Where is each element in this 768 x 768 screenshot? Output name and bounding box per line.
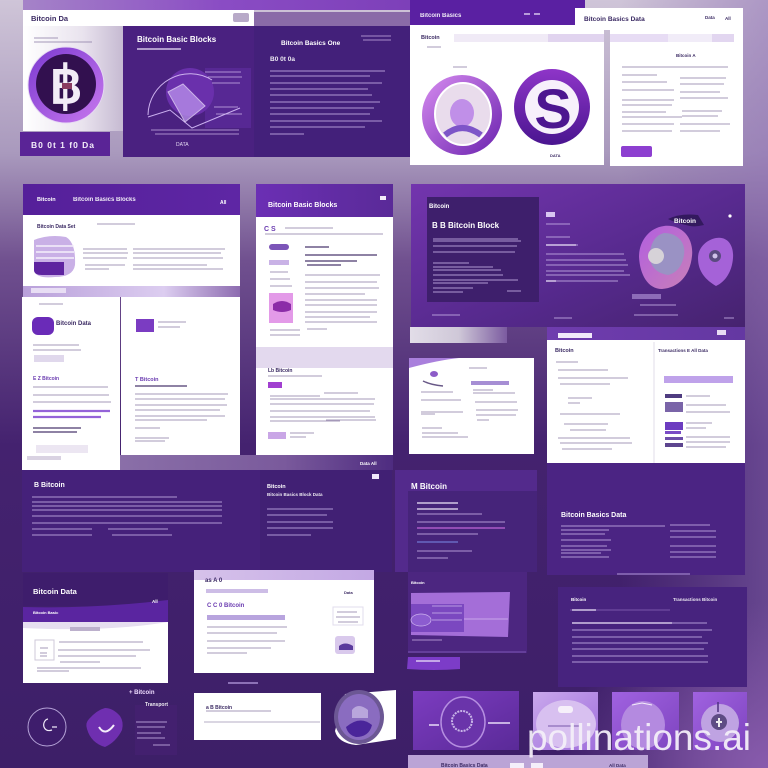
panel: purple list card <box>395 470 537 572</box>
text block: hero dark column <box>433 239 521 292</box>
panel: top right header <box>410 0 585 25</box>
text block: hero centre <box>546 212 630 281</box>
illustration: large blob <box>639 226 692 289</box>
panel: left report stack: E Z Bitcoin <box>33 376 59 382</box>
panel: centre report: Data All <box>360 461 377 466</box>
panel: left report stack: Bitcoin Basics Blocks <box>73 197 136 203</box>
illustration: wireframe wallet <box>148 68 251 134</box>
icon: small document <box>35 640 54 660</box>
panel: dark sheet bottom-left: All <box>152 599 158 604</box>
heading: bottom-left sheet: Bitcoin Data <box>33 587 78 596</box>
panel: left report stack: All <box>220 200 227 206</box>
panel: dark article with illustration: DATA <box>176 142 189 148</box>
icon: purple rounded diamond <box>86 708 123 747</box>
heading: left report: Bitcoin <box>37 197 56 203</box>
button: coin card: B0 0t 1 f0 Da <box>31 140 95 150</box>
panel: lilac square <box>533 692 598 750</box>
heading: centre report: Bitcoin Basic Blocks <box>268 202 337 209</box>
panel: purple hero with blobs <box>411 184 745 327</box>
panel: purple square with ring <box>413 691 519 750</box>
icon: small corner mark <box>372 474 379 479</box>
panel: dark note card <box>547 463 745 575</box>
panel: white bottom card <box>194 693 321 740</box>
heading: wide report right: Transactions E All Data <box>658 348 708 353</box>
panel: dark article row <box>22 470 392 572</box>
panel: wide white report <box>547 327 745 463</box>
panel: lilac chart card: Bitcoin <box>411 580 425 585</box>
icon: purple badge <box>32 317 54 335</box>
subheading: article: Bitcoin A <box>676 53 696 58</box>
illustration: small blob <box>698 238 733 286</box>
heading: hero: B B Bitcoin Block <box>432 221 500 230</box>
panel: dark sheet bottom-left <box>23 573 168 683</box>
icon: side tags <box>269 244 293 323</box>
panel: dark sheet bottom-left: Bitcoin Basic <box>33 610 59 615</box>
heading: dark row right: Bitcoin <box>267 484 286 490</box>
button: coin card <box>20 132 110 156</box>
icon: dark chip: Bitcoin <box>674 218 696 225</box>
panel: white card with lilac top <box>194 570 374 673</box>
button: lilac card <box>407 657 460 670</box>
panel: purple square with pendant <box>693 692 747 750</box>
icon: lilac portrait coin <box>422 75 502 155</box>
panel: white bottom card: a B Bitcoin <box>206 705 232 711</box>
panel: centre report: C S <box>264 226 276 233</box>
panel: top right white header: All <box>725 16 731 21</box>
heading: left column: Bitcoin Data <box>56 321 92 327</box>
heading: wide report left: Bitcoin <box>555 348 574 354</box>
button: article <box>621 146 652 157</box>
icon: curled sheet badge <box>334 690 396 745</box>
heading: dark article left: Bitcoin Basic Blocks <box>137 35 217 44</box>
heading: coins card: Bitcoin <box>421 35 440 41</box>
watermark: pollinations.ai <box>527 717 751 758</box>
subheading: dark article: B0 0t 0a <box>270 56 295 63</box>
panel: coin card <box>20 10 410 156</box>
heading: note card: Bitcoin Basics Data <box>561 512 626 519</box>
panel: left report stack: Bitcoin Data Set <box>37 224 76 230</box>
panel: top right white header <box>575 8 743 30</box>
panel: white card with lilac top: Data <box>344 590 353 595</box>
panel: top right white header: Bitcoin Basics Data <box>584 16 645 23</box>
icon: outlined circle <box>28 708 66 746</box>
heading: list card: M Bitcoin <box>411 482 447 491</box>
panel: dark text card <box>558 587 747 687</box>
panel: grey strip <box>410 327 507 343</box>
text block: article <box>622 67 730 131</box>
heading: dark article right: Bitcoin Basics One <box>281 40 341 47</box>
panel: top right white header: Data <box>705 15 715 20</box>
icon: letter S coin <box>514 69 590 145</box>
panel: centre report <box>256 184 393 466</box>
panel: left report stack <box>22 184 393 470</box>
heading: coin card: Bitcoin Da <box>31 14 69 23</box>
icon: bitcoin coin: ฿ <box>49 57 83 115</box>
panel: purple square with dome <box>612 692 679 750</box>
heading: dark row left: B Bitcoin <box>34 482 65 489</box>
panel: bottom lilac sheet: All Data <box>609 763 626 768</box>
panel: dark text card: Bitcoin <box>571 597 587 602</box>
panel: white card with lilac top: as A 0 <box>205 578 223 584</box>
icon: small purple tag <box>136 319 154 332</box>
icon: bitcoin coin <box>28 47 104 123</box>
text block: dark row right <box>267 509 333 535</box>
panel: top right article <box>610 30 743 166</box>
panel: centre report: Lb Bitcoin <box>268 368 292 374</box>
panel: lilac chart card <box>408 572 527 653</box>
top purple band <box>23 0 423 10</box>
panel: dark article with illustration <box>123 26 410 157</box>
icon: dark chip <box>668 214 704 226</box>
label: bottom tag: + Bitcoin <box>129 690 155 696</box>
heading: hero tag: Bitcoin <box>429 204 450 210</box>
panel: top right header: Bitcoin Basics <box>420 13 462 19</box>
panel: top right coins card: DATA <box>550 153 561 158</box>
icon: wallet illustration <box>34 236 75 277</box>
icon: side note <box>333 607 363 654</box>
heading: right column: T Bitcoin <box>135 377 159 383</box>
panel: bottom lilac sheet <box>408 755 648 768</box>
panel: dark article row: Bitcoin Basics Block Data <box>267 492 323 497</box>
panel: top right coins card <box>410 25 604 165</box>
icon: tag <box>233 13 249 22</box>
heading: white card: C C 0 Bitcoin <box>207 603 245 609</box>
icon: letter S coin: S <box>534 77 572 140</box>
text block: dark article <box>270 71 385 134</box>
panel: small white card <box>409 358 534 454</box>
text block: dark row left <box>32 497 222 535</box>
panel: small text card <box>135 702 177 755</box>
panel: dark text card: Transactions Bitcoin <box>673 597 718 602</box>
panel: small text card: Transport <box>145 702 168 708</box>
